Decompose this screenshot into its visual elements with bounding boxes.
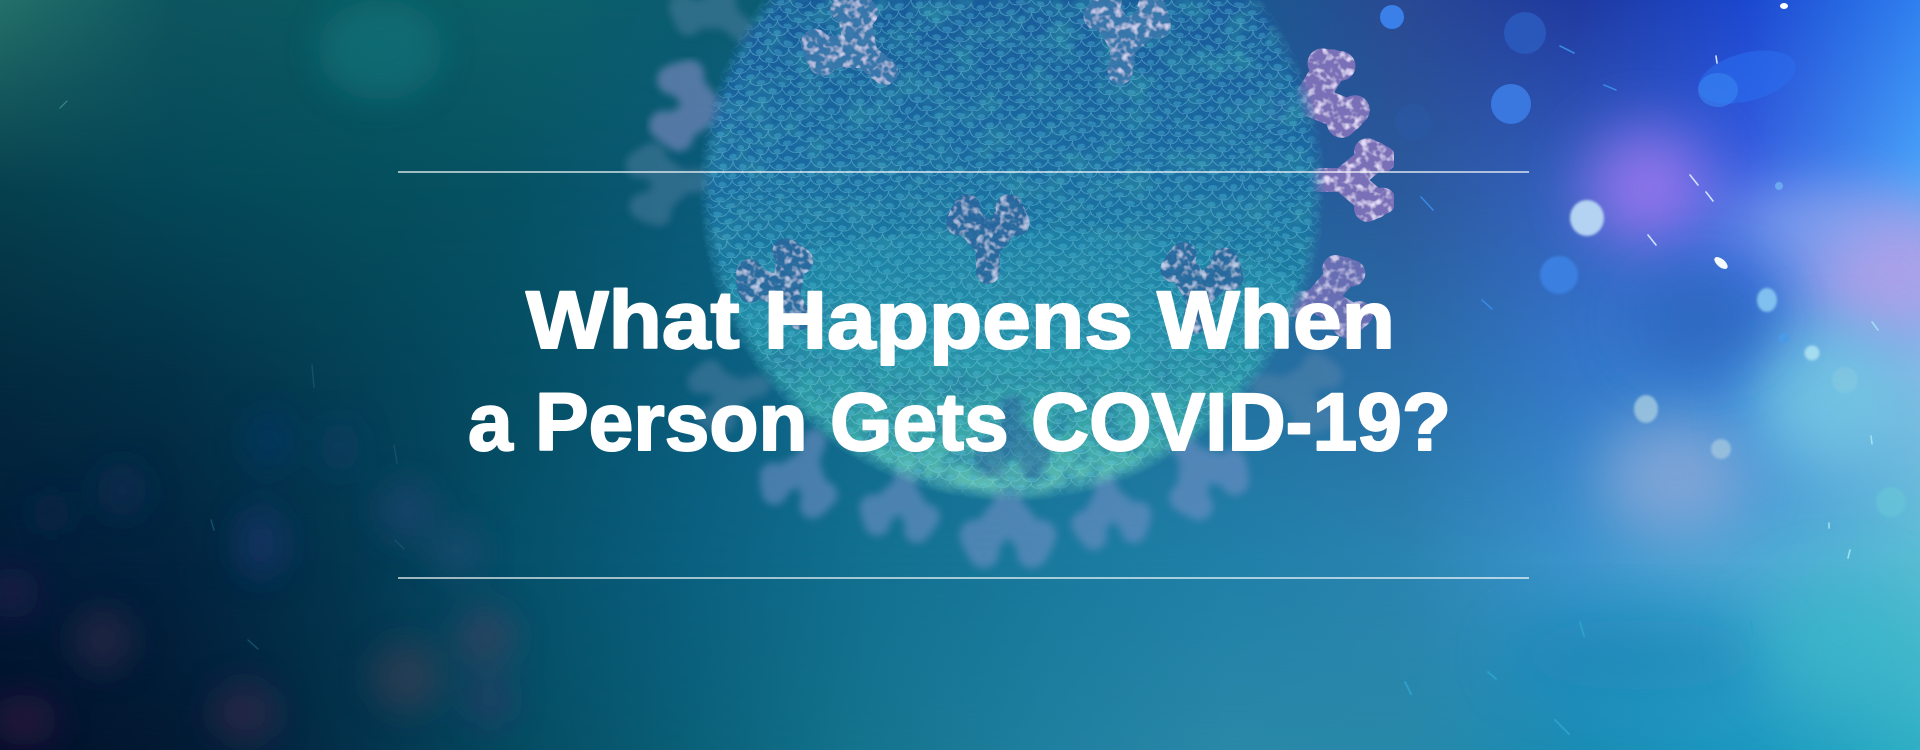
virus sphere	[690, 0, 1340, 510]
floating bokeh particles	[1380, 3, 1906, 517]
bottom divider line	[398, 577, 1529, 579]
blurred distant virus at bottom left	[0, 0, 516, 746]
top divider line	[398, 171, 1529, 173]
title: a Person Gets COVID-19?	[468, 377, 1451, 468]
title	[468, 275, 1451, 468]
light glows on the right	[1510, 129, 1920, 700]
surface spikes on the virus	[743, 0, 1232, 466]
back spikes of the virus	[638, 0, 1383, 553]
title: What Happens When	[526, 275, 1395, 366]
